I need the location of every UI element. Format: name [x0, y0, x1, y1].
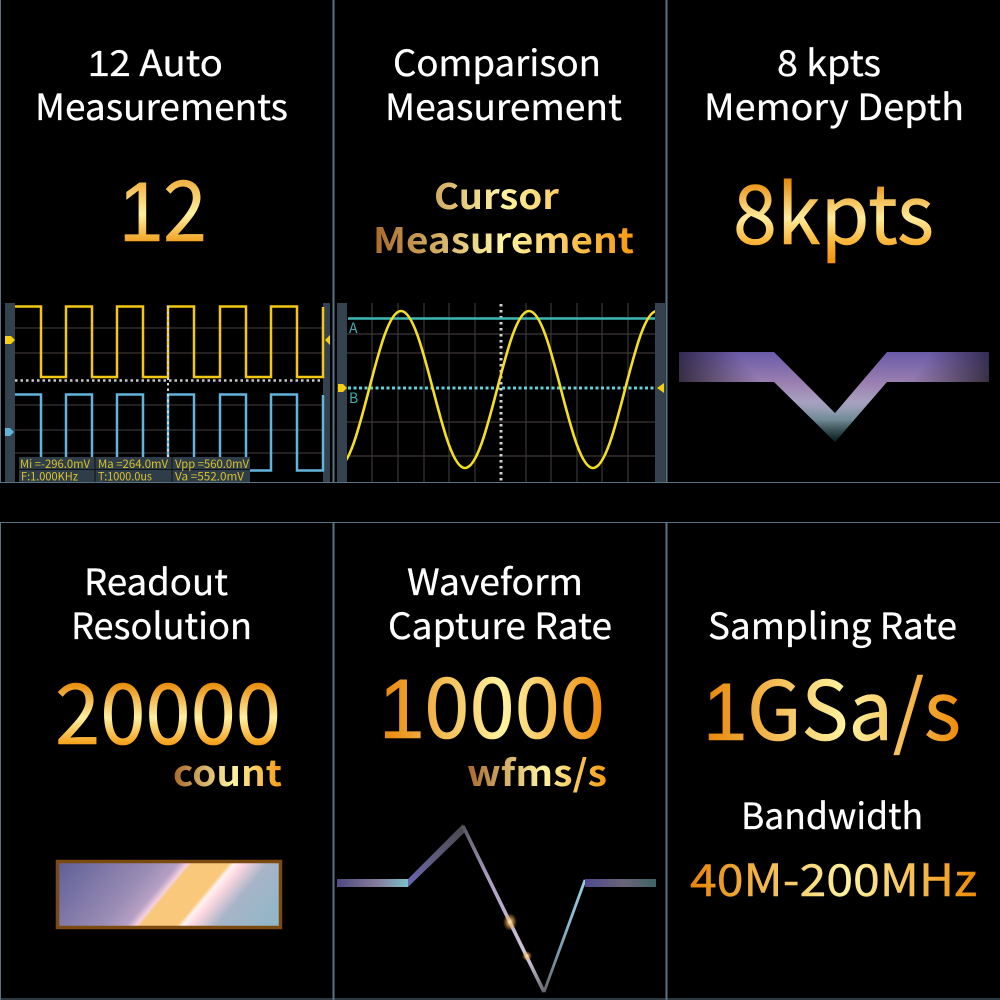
- heading: Comparison Measurement: Comparison: [393, 35, 601, 87]
- cursor labels: [349, 318, 358, 408]
- channel markers: [5, 335, 330, 436]
- big number 10000: 10000: [379, 642, 605, 763]
- cursor line B: [348, 386, 655, 390]
- heading: Comparison Measurement: [385, 35, 622, 131]
- cursor labels: A: [349, 318, 358, 338]
- measurement readout table: T:1000.0us: [98, 468, 152, 484]
- measurement readout table: Va =552.0mV: [175, 468, 244, 484]
- heading: Readout Resolution: Readout: [84, 554, 228, 606]
- heading: Waveform Capture Rate: Capture Rate: [388, 598, 612, 650]
- heading: 12 Auto Measurements: [35, 35, 288, 131]
- heading: 8 kpts Memory Depth: 8 kpts: [777, 35, 881, 87]
- big value 1GSa/s: 1GSa/s: [703, 645, 961, 764]
- unit: wfms/s: wfms/s: [467, 745, 607, 797]
- cursor labels: B: [349, 388, 358, 408]
- big number 12: 12: [119, 145, 207, 266]
- gold label: Cursor Measurement: [373, 169, 634, 264]
- panel: comparison measurement: [337, 35, 665, 482]
- heading: Comparison Measurement: Measurement: [385, 79, 622, 131]
- measurement readout table: [19, 456, 250, 484]
- heading: Readout Resolution: [71, 554, 252, 650]
- unit: count: count: [173, 745, 282, 797]
- oscilloscope screen: square waves: [5, 303, 330, 484]
- yellow square wave: [15, 306, 323, 377]
- heading: 12 Auto Measurements: Measurements: [35, 79, 288, 131]
- gradient bar with diagonal stripe: [58, 862, 280, 928]
- measurement readout table: Mi =-296.0mV: [20, 456, 90, 472]
- panel: waveform capture rate: [337, 554, 656, 992]
- measurement readout table: Vpp =560.0mV: [175, 456, 249, 472]
- trigger markers: [338, 383, 664, 393]
- heading: Waveform Capture Rate: Waveform: [407, 554, 583, 606]
- panel: sampling rate and bandwidth: [690, 598, 977, 909]
- heading: 8 kpts Memory Depth: [704, 35, 964, 131]
- light glints: [503, 913, 532, 961]
- big value 8kpts: 8kpts: [733, 149, 934, 268]
- panel: 12 auto measurements: [5, 35, 330, 484]
- cursor line A: [348, 317, 655, 320]
- heading: Readout Resolution: Resolution: [71, 598, 252, 650]
- gold label: Cursor Measurement: Measurement: [373, 213, 634, 264]
- blue square wave: [15, 394, 323, 482]
- value 40M-200MHz: 40M-200MHz: [690, 845, 977, 909]
- panel: readout resolution: [55, 554, 282, 928]
- heading: Waveform Capture Rate: [388, 554, 612, 650]
- oscilloscope screen: sine wave with cursors: [337, 303, 665, 482]
- gold label: Cursor Measurement: Cursor: [434, 169, 560, 220]
- waveform spike graphic: [337, 824, 656, 992]
- heading: Sampling Rate: Sampling Rate: [708, 598, 957, 650]
- heading: 12 Auto Measurements: 12 Auto: [88, 35, 223, 87]
- big number 20000: 20000: [55, 648, 281, 769]
- measurement readout table: Ma =264.0mV: [98, 456, 168, 472]
- heading: Bandwidth: Bandwidth: [741, 788, 923, 840]
- yellow sine wave: [337, 311, 657, 468]
- heading: 8 kpts Memory Depth: Memory Depth: [704, 79, 964, 131]
- waveform notch graphic: [679, 352, 989, 442]
- measurement readout table: F:1.000KHz: [21, 468, 79, 484]
- panel: memory depth: [679, 35, 989, 442]
